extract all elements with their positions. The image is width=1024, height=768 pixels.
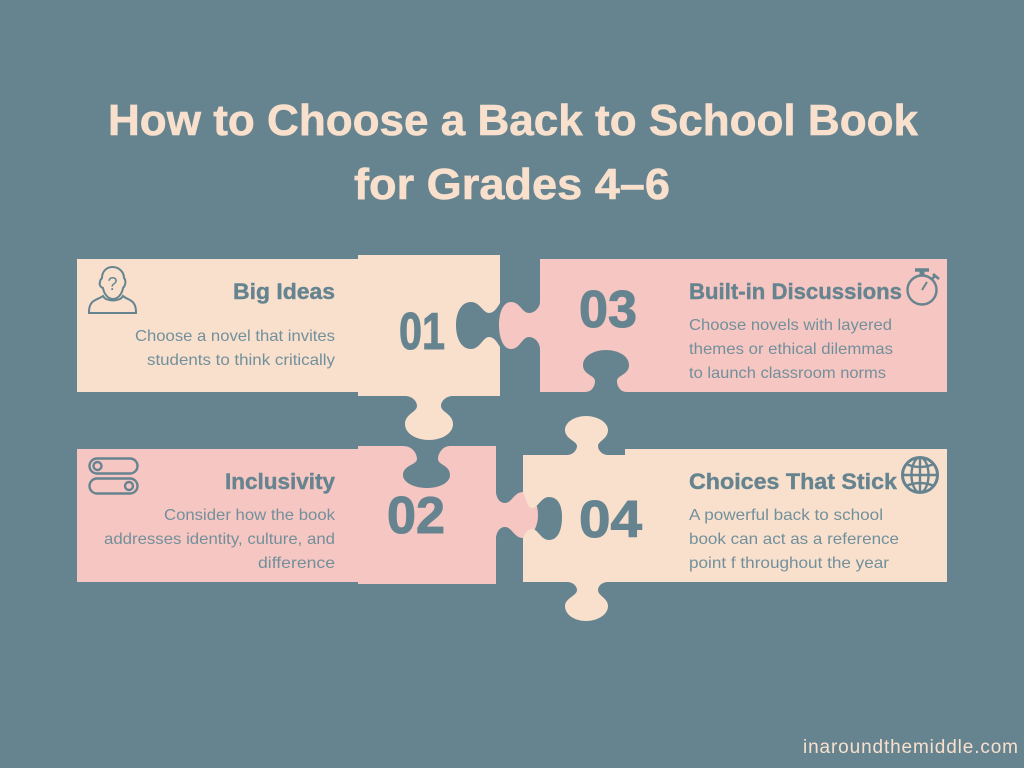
puzzle piece 03 (499, 259, 947, 392)
number 02: 02 (387, 487, 445, 545)
icon: stopwatch (908, 270, 939, 304)
number 04: 04 (579, 491, 642, 549)
text: Choices That Stick body (689, 507, 899, 572)
title: How to Choose a Back to School Book (108, 96, 919, 145)
icon: person with question mark (89, 267, 136, 313)
heading: Built-in Discussions: Built-in Discussions (689, 279, 902, 304)
text: Big Ideas body: students to think critically (147, 352, 335, 369)
text: Big Ideas body: Choose a novel that invites (135, 328, 335, 345)
icon: globe (902, 457, 938, 493)
title: for Grades 4–6 (354, 160, 670, 209)
text: Choices That Stick body: book can act as a reference (689, 531, 899, 548)
footer: website: inaroundthemiddle.com (803, 737, 1018, 758)
title (108, 96, 919, 209)
puzzle piece 02 (77, 446, 538, 584)
text: Big Ideas body (135, 328, 335, 369)
text: Built-in Discussions body: to launch classroom norms (689, 365, 886, 382)
heading: Big Ideas: Big Ideas (233, 279, 335, 304)
text: Inclusivity body (104, 507, 336, 572)
number 01: 01 (399, 303, 445, 361)
text: Inclusivity body: Consider how the book (164, 507, 336, 524)
heading: Choices That Stick: Choices That Stick (689, 469, 898, 494)
text: Built-in Discussions body (689, 317, 893, 382)
number 03: 03 (579, 281, 637, 339)
icon: toggle switches (90, 458, 138, 494)
icon: person with question mark: ? (108, 274, 118, 294)
puzzle piece 04 (523, 416, 947, 621)
puzzle piece 01 (77, 255, 500, 440)
text: Choices That Stick body: A powerful back to school (689, 507, 883, 524)
heading: Inclusivity: Inclusivity (225, 469, 336, 494)
text: Inclusivity body: addresses identity, culture, and (104, 531, 335, 548)
text: Choices That Stick body: point f throughout the year (689, 555, 890, 572)
panel: 02 Inclusivity (77, 446, 538, 584)
panel: 04 Choices That Stick (523, 416, 947, 621)
text: Built-in Discussions body: themes or ethical dilemmas (689, 341, 893, 358)
panel: 03 Built-in Discussions (499, 259, 947, 392)
text: Built-in Discussions body: Choose novels with layered (689, 317, 892, 334)
text: Inclusivity body: difference (258, 555, 335, 572)
panel: 01 Big Ideas (77, 255, 500, 440)
